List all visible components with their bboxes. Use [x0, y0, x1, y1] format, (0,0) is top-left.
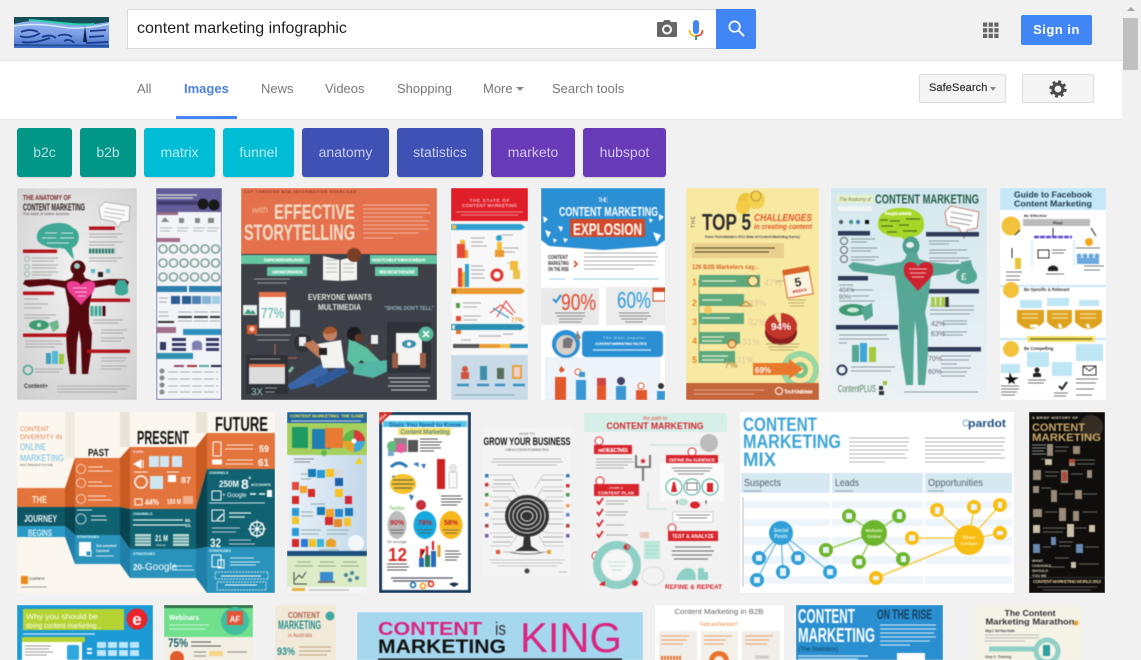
icon: gear	[1049, 80, 1067, 98]
thumbnail: anatomy teal figure: £	[961, 272, 967, 283]
thumbnail: grow your business	[483, 432, 571, 574]
thumbnail: anatomy of content marketing	[17, 188, 137, 400]
thumbnail: effective storytelling: 3X	[251, 387, 263, 398]
thumbnail: content marketing explosion: THE	[598, 198, 608, 204]
thumbnail: past present future journey: FORM	[133, 450, 143, 454]
thumbnail: grow your business: HOW TO	[519, 432, 535, 436]
thumbnail: stats you need to know: 90%	[390, 520, 405, 527]
thumbnail: past present future journey: 250M	[219, 479, 239, 489]
thumbnail: past present future journey: STRATEGIES	[77, 535, 100, 539]
thumbnail: effective storytelling: with	[252, 205, 268, 215]
chip: matrix	[144, 128, 215, 177]
tab: Shopping: Shopping	[397, 81, 452, 96]
tab: Images: Images	[184, 81, 229, 96]
thumbnail: top 5 challenges: ?%	[724, 360, 738, 370]
thumbnail: content marketing in b2b: Facts and Numbers?	[700, 622, 738, 628]
thumbnail: statistics with headphones	[156, 188, 222, 400]
tab: More: More	[483, 81, 513, 96]
thumbnail: past present future journey: BEGINS	[28, 528, 52, 538]
thumbnail: path to content marketing: CONTENT MARKETING	[606, 421, 704, 431]
thumbnail: webinars: AF	[230, 615, 240, 624]
thumbnail: anatomy teal figure: ContentPLUS	[838, 384, 876, 395]
thumbnail: effective storytelling: MULTIMEDIA	[318, 302, 361, 312]
thumbnail: content marketing marathon: Step 2: Training	[985, 655, 1011, 659]
active tab underline	[176, 116, 237, 119]
thumbnail: past present future journey: Content	[96, 549, 110, 553]
thumbnail: content marketing marathon	[976, 606, 1082, 660]
thumbnail: why you should be doing content marketing	[17, 605, 153, 660]
thumbnail: effective storytelling: HOW TO HELP THEM SOMEDAY	[372, 258, 426, 262]
thumbnail: brief history of content marketing: CONTENT MARKETING WORLD 2013	[1033, 579, 1101, 584]
thumbnail: effective storytelling	[241, 188, 437, 400]
icon: microphone	[688, 20, 704, 40]
thumbnail: past present future journey: MARKETING	[20, 453, 64, 463]
thumbnail: content marketing mix: Social	[774, 528, 789, 534]
thumbnail: top 5 challenges: TechValidate	[784, 390, 813, 396]
tab: News: News	[261, 81, 294, 96]
thumbnail: anatomy teal figure: 60%	[928, 369, 942, 376]
thumbnail: path to content marketing	[584, 412, 727, 591]
thumbnail: past present future journey: Set-oriented	[96, 544, 116, 548]
thumbnail: effective storytelling: EVERYONE WANTS	[308, 292, 372, 302]
thumbnail: stats you need to know: 58%	[444, 520, 459, 527]
thumbnail: content is king: CONTENT	[378, 619, 482, 639]
chip: funnel: funnel	[239, 144, 278, 160]
thumbnail: brief history of content marketing: WHAT	[1032, 559, 1044, 563]
thumbnail: content marketing marathon: Step 1: Set Your Goals	[985, 629, 1015, 633]
logo doodle	[14, 17, 109, 48]
thumbnail: effective storytelling: "SHOW, DON'T TELL"	[384, 306, 435, 312]
thumbnail: content marketing mix: pardot	[968, 418, 1006, 430]
SafeSearch button	[919, 74, 1006, 103]
thumbnail: webinars: Webinars	[169, 615, 199, 622]
thumbnail: anatomy of content marketing: Content+	[24, 383, 48, 390]
thumbnail: top 5 challenges: 47%	[764, 278, 782, 288]
thumbnail: effective storytelling: EVERYONE IS OVERLOADED	[264, 258, 304, 262]
thumbnail: anatomy teal figure: 63%	[931, 331, 945, 338]
thumbnail: past present future journey: 53.	[185, 523, 191, 528]
thumbnail: past present future journey: Shared	[156, 543, 166, 547]
chip: hubspot: hubspot	[600, 144, 649, 160]
thumbnail: top 5 challenges: 3	[692, 317, 697, 327]
tab: All: All	[137, 81, 151, 96]
thumbnail: effective storytelling: 77%	[261, 305, 284, 322]
thumbnail: top 5 challenges: 31%	[742, 337, 760, 347]
thumbnail: path to content marketing: the path to	[643, 416, 667, 422]
thumbnail: top 5 challenges: 5	[794, 275, 803, 290]
chip: statistics	[397, 128, 483, 177]
thumbnail: past present future journey: ONLINE	[20, 442, 46, 452]
thumbnail: content is king: KING	[520, 614, 622, 660]
thumbnail: content marketing mix	[740, 412, 1014, 593]
thumbnail: past present future journey: 90.	[185, 518, 191, 523]
thumbnail: stats you need to know: 78%	[418, 520, 433, 527]
thumbnail: anatomy teal figure: 404%	[839, 288, 855, 294]
thumbnail: content marketing the game	[287, 412, 367, 592]
chip: b2c: b2c	[33, 144, 56, 160]
thumbnail: past present future journey: CHANNELS	[209, 471, 229, 475]
thumbnail: top 5 challenges: 5	[692, 355, 697, 365]
thumbnail: guide to facebook content marketing: Post	[1053, 220, 1063, 226]
settings button	[1022, 74, 1094, 103]
sign in button: Sign in	[1033, 22, 1080, 37]
thumbnail: anatomy teal figure: 90%	[839, 295, 852, 301]
thumbnail: content marketing on the rise	[796, 605, 943, 660]
thumbnail: past present future journey: 32	[210, 536, 221, 550]
thumbnail: content marketing mix: Posts	[774, 534, 788, 540]
chip: anatomy	[302, 128, 389, 177]
icon: camera	[657, 20, 677, 37]
thumbnail: content marketing explosion: CONTENT	[548, 255, 568, 261]
thumbnail: top 5 challenges: 32%	[748, 317, 766, 327]
thumbnail: past present future journey: 20-	[133, 563, 145, 572]
thumbnail: top 5 challenges	[686, 188, 819, 400]
thumbnail: content marketing mix: Opportunities	[928, 478, 983, 489]
thumbnail: past present future journey: 21 M	[155, 534, 168, 543]
thumbnail: content marketing in australia: 93%	[277, 646, 295, 658]
thumbnail: anatomy of content marketing: CONTENT MARKETING	[23, 202, 85, 214]
thumbnail: state of content marketing	[451, 188, 528, 400]
thumbnail: path to content marketing: set OBJECTIVES	[598, 448, 629, 454]
search query text: content marketing infographic	[137, 20, 347, 37]
thumbnail: past present future journey: STRATEGIES	[209, 549, 232, 553]
thumbnail: past present future journey: STRATEGIES	[133, 552, 156, 556]
thumbnail: past present future journey: 59	[259, 444, 269, 454]
thumbnail: grow your business: USING CONTENT MARKETING	[505, 448, 549, 452]
thumbnail: past present future journey: PAST	[88, 448, 109, 459]
scrollbar up arrow	[1127, 7, 1135, 11]
thumbnail: brief history of content marketing: SHOULD	[1032, 569, 1048, 573]
thumbnail: stats you need to know: Stats You Need to Know	[389, 422, 462, 429]
chip: funnel	[223, 128, 294, 177]
thumbnail: past present future journey: 193 M	[167, 497, 181, 506]
thumbnail: content marketing mix: Website	[865, 528, 883, 533]
thumbnail: past present future journey: COPIFIT	[29, 576, 45, 581]
thumbnail: content marketing explosion: CONTENT MARKETING TACTICS	[595, 341, 647, 346]
thumbnail: content marketing mix: MIX	[743, 450, 776, 471]
thumbnail: brief history of content marketing	[1029, 412, 1105, 593]
thumbnail: stats you need to know: 2014	[377, 412, 388, 422]
thumbnail: anatomy teal figure: The Anatomy of	[839, 197, 872, 203]
thumbnail: stats you need to know: Content Marketing	[400, 430, 450, 436]
thumbnail: content marketing in b2b: Content Marketing in B2B	[674, 607, 764, 616]
thumbnail: content is king: is	[495, 619, 506, 639]
thumbnail: content marketing mix: Online	[867, 534, 881, 539]
chip: b2b	[80, 128, 136, 177]
thumbnail: brief history of content marketing: YOU BE	[1032, 574, 1047, 578]
thumbnail: past present future journey: DIVERSITY IN	[20, 434, 62, 441]
thumbnail: brief history of content marketing: CONTENT	[1032, 422, 1085, 434]
thumbnail: stats you need to know: Twitter	[389, 506, 405, 512]
chip: marketo: marketo	[508, 144, 558, 160]
sign in button	[1021, 15, 1092, 45]
thumbnail: content marketing marathon: The Content	[1004, 608, 1056, 618]
thumbnail: content marketing in b2b	[655, 605, 784, 660]
top bar background	[0, 0, 1122, 61]
thumbnail: past present future journey	[17, 412, 275, 593]
thumbnail: brief history of content marketing: CHANGES	[1032, 564, 1051, 568]
thumbnail: content marketing explosion: The most popular	[603, 336, 646, 340]
thumbnail: top 5 challenges: 31%	[736, 355, 754, 365]
thumbnail: guide to facebook content marketing: Be Effective	[1024, 213, 1048, 218]
scrollbar thumb	[1123, 18, 1138, 70]
navigation strip	[0, 61, 1122, 120]
thumbnail: past present future journey: PAST PRESENT FUTURE	[20, 463, 53, 467]
thumbnail: anatomy of content marketing: THE ANATOMY OF	[23, 193, 71, 202]
thumbnail: content marketing explosion: 90%	[561, 289, 596, 315]
search box	[127, 9, 716, 49]
thumbnail: top 5 challenges: TOP 5	[702, 209, 751, 235]
thumbnail: past present future journey: +	[248, 476, 252, 482]
thumbnail: past present future journey: 8	[241, 476, 249, 492]
thumbnail: path to content marketing: REFINE & REPEAT	[665, 584, 722, 591]
thumbnail: path to content marketing: CONTENT PLAN	[598, 490, 634, 496]
thumbnail: content is king	[357, 612, 643, 660]
icon: dropdown arrow	[990, 87, 996, 91]
thumbnail: top 5 challenges: 4	[692, 336, 697, 346]
thumbnail: content is king: MARKETING	[378, 637, 506, 658]
thumbnail: brief history of content marketing: MARKETING	[1032, 432, 1101, 444]
chip: matrix: matrix	[160, 144, 199, 160]
thumbnail: top 5 challenges: 69%	[755, 366, 771, 375]
thumbnail: content marketing mix: MARKETING	[743, 432, 841, 453]
thumbnail: why you should be doing content marketing: e	[132, 610, 142, 629]
thumbnail: effective storytelling: WITH INFORMATION	[272, 270, 303, 274]
thumbnail: past present future journey: PRESENT	[137, 428, 189, 448]
thumbnail: effective storytelling: EFFECTIVE	[274, 201, 355, 224]
thumbnail: content marketing explosion: ON THE RISE	[548, 267, 569, 273]
thumbnail: effective storytelling: CUT THROUGH B2B INFORMATION OVERLOAD	[244, 190, 356, 194]
thumbnail: stats you need to know: 12	[388, 545, 407, 565]
tab: Search tools: Search tools	[552, 81, 624, 96]
thumbnail: content marketing explosion: MARKETING	[548, 261, 569, 267]
thumbnail: content marketing in australia: CONTENT	[288, 611, 320, 620]
chip: statistics: statistics	[413, 144, 467, 160]
thumbnail: stats you need to know	[377, 412, 471, 593]
thumbnail: content marketing in australia	[275, 605, 336, 660]
tab: Videos: Videos	[325, 81, 365, 96]
thumbnail: content marketing on the rise: CONTENT	[798, 606, 855, 628]
thumbnail: content marketing explosion: 60%	[617, 287, 651, 313]
thumbnail: why you should be doing content marketing: doing content marketing...	[26, 623, 102, 630]
thumbnail: path to content marketing: DEFINE the AUDIENCE	[669, 458, 715, 462]
thumbnail: past present future journey: 87	[181, 476, 192, 485]
thumbnail: content marketing mix: Suspects	[744, 478, 781, 489]
thumbnail: top 5 challenges: 2	[692, 298, 697, 308]
icon: magnifier	[728, 20, 745, 37]
thumbnail: top 5 challenges: 126 B2B Marketers say...	[692, 264, 759, 271]
thumbnail: state of content marketing: CONTENT MARKETING	[462, 203, 517, 208]
chip: marketo	[491, 128, 575, 177]
thumbnail: anatomy of content marketing: The heart of online success	[23, 212, 69, 216]
thumbnail: past present future journey: JOURNEY	[24, 514, 57, 525]
thumbnail: stats you need to know: On average	[387, 540, 407, 544]
thumbnail: past present future journey: CONTENT	[20, 426, 49, 433]
thumbnail: past present future journey: Google	[145, 562, 178, 573]
thumbnail: top 5 challenges: 94%	[771, 322, 791, 333]
thumbnail: content marketing mix: CONTENT	[743, 415, 817, 436]
thumbnail: past present future journey: 61	[258, 458, 269, 469]
thumbnail: brief history of content marketing: A BRIEF HISTORY OF	[1032, 416, 1079, 420]
thumbnail: effective storytelling: STORYTELLING	[244, 220, 355, 245]
thumbnail: effective storytelling: RISE ABOVE THE NOISE	[379, 270, 415, 274]
thumbnail: anatomy teal figure: 42%	[931, 321, 945, 328]
thumbnail: top 5 challenges: THE	[691, 215, 697, 228]
thumbnail: why you should be doing content marketing: Why you should be	[26, 614, 98, 621]
thumbnail: content marketing on the rise: MARKETING	[798, 625, 875, 647]
thumbnail: past present future journey: + Google	[222, 493, 247, 499]
thumbnail: content marketing mix: Contact	[961, 541, 978, 546]
chip: b2b: b2b	[96, 144, 120, 160]
thumbnail: state of content marketing: 77%	[511, 318, 524, 324]
thumbnail: content marketing mix: Leads	[835, 478, 859, 489]
thumbnail: guide to facebook content marketing: Guide to Facebook	[1014, 190, 1093, 200]
chip: anatomy: anatomy	[319, 144, 372, 160]
thumbnail: content marketing on the rise: (The Statistics)	[798, 647, 838, 653]
thumbnail: guide to facebook content marketing	[1000, 188, 1106, 400]
thumbnail: guide to facebook content marketing: Be Specific & Relevant	[1024, 287, 1070, 292]
chip: hubspot	[583, 128, 666, 177]
thumbnail: top 5 challenges: From TechValidate's 2011 State of Content Marketing Survey	[705, 235, 801, 239]
thumbnail: path to content marketing: create a	[609, 486, 623, 490]
thumbnail: anatomy teal figure	[831, 188, 987, 396]
thumbnail: past present future journey: CHANNELS	[133, 512, 153, 516]
SafeSearch label: SafeSearch	[929, 82, 987, 94]
thumbnail: past present future journey: 44%	[145, 498, 159, 507]
chip: b2c	[17, 128, 72, 177]
thumbnail: webinars: 75%	[168, 636, 188, 650]
thumbnail: content marketing marathon: Marketing Marathon	[986, 616, 1074, 626]
thumbnail: content marketing explosion	[541, 188, 665, 400]
thumbnail: anatomy teal figure: 70%	[928, 356, 942, 363]
thumbnail: guide to facebook content marketing: Be Compelling	[1024, 346, 1054, 351]
icon: more arrow	[516, 87, 524, 91]
thumbnail: anatomy teal figure: Thought Leadership	[884, 211, 912, 216]
thumbnail: path to content marketing: TEST & ANALYZE	[672, 534, 715, 540]
thumbnail: content marketing in australia: in Australia	[288, 633, 312, 639]
thumbnail: content marketing the game: CONTENT MARKETING: THE GAME	[290, 414, 364, 418]
thumbnail: top 5 challenges: WEEKS	[792, 287, 807, 294]
thumbnail: guide to facebook content marketing: Content Marketing	[1014, 200, 1092, 208]
thumbnail: top 5 challenges: 1	[692, 277, 697, 287]
icon: apps grid	[983, 22, 999, 38]
thumbnail: state of content marketing: THE STATE OF	[470, 198, 510, 203]
thumbnail: top 5 challenges: 33%	[748, 298, 766, 308]
thumbnail: content marketing mix: Direct	[963, 535, 976, 540]
thumbnail: webinars	[164, 605, 253, 660]
search button	[716, 9, 756, 49]
thumbnail: past present future journey: ACCOUNTS	[251, 483, 271, 487]
thumbnail: past present future journey: THE	[32, 495, 47, 506]
